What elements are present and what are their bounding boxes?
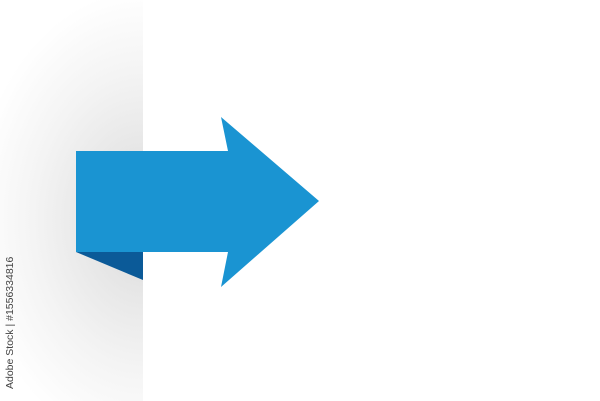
- watermark text: Adobe Stock | #1556334816: [4, 257, 16, 389]
- panel: shadow page: [0, 0, 143, 401]
- arrow body: [76, 117, 319, 287]
- fold: [76, 252, 143, 280]
